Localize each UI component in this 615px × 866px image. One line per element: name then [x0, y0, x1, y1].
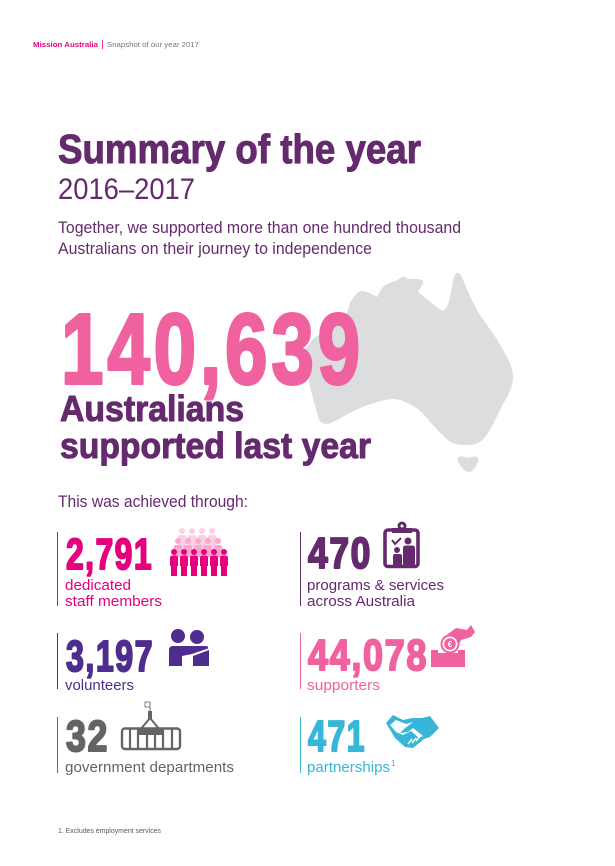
title: Summary of the year [58, 126, 421, 172]
intro text: Together, we supported more than one hundred thousand [58, 218, 461, 237]
stat: volunteers: volunteers [65, 678, 134, 694]
map of Australia [305, 273, 513, 472]
subtitle: years: 2016–2017 [58, 173, 195, 206]
page header [33, 40, 199, 49]
icon: donation box: € [448, 640, 453, 649]
stat: staff [57, 528, 228, 610]
stat: government departments: 32 [66, 712, 109, 761]
intro text: Australians on their journey to independence [58, 239, 372, 258]
stat: partnerships: 471 [308, 712, 366, 761]
icon: volunteers [169, 629, 209, 666]
stat: programs and services: across Australia [307, 594, 416, 610]
big number: 140,639 [61, 294, 364, 406]
stat: volunteers [57, 629, 209, 694]
lead-in text: This was achieved through: [58, 492, 248, 511]
icon: handshake [386, 715, 439, 748]
stat: government departments: government departments [65, 760, 234, 776]
stat: supporters: supporters [307, 678, 380, 694]
stat: staff: staff members [65, 594, 162, 610]
stat: programs and services: programs & services [307, 578, 444, 594]
stat: supporters: 44,078 [308, 631, 428, 680]
page header: Snapshot of our year 2017 [107, 40, 199, 49]
stat: staff: 2,791 [66, 530, 153, 579]
intro text [58, 218, 461, 258]
icon: staff group [170, 528, 228, 576]
stat: government departments [57, 702, 234, 776]
stat: supporters [300, 625, 475, 694]
headline [60, 388, 371, 466]
stat: programs and services [300, 522, 444, 610]
stat: staff: dedicated [65, 578, 131, 594]
footnote: 1. Excludes employment services [58, 826, 161, 835]
page header: Mission Australia [33, 40, 99, 49]
headline: Australians [60, 388, 244, 429]
stat: programs and services: 470 [308, 529, 372, 578]
stat: partnerships [300, 712, 439, 776]
icon: donation box [431, 625, 475, 667]
stat: partnerships: partnerships [307, 760, 390, 776]
icon: parliament house [122, 702, 180, 749]
icon: clipboard [385, 522, 418, 566]
stat: partnerships: 1 [391, 759, 396, 768]
headline: supported last year [60, 425, 371, 466]
stat: volunteers: 3,197 [66, 632, 154, 681]
